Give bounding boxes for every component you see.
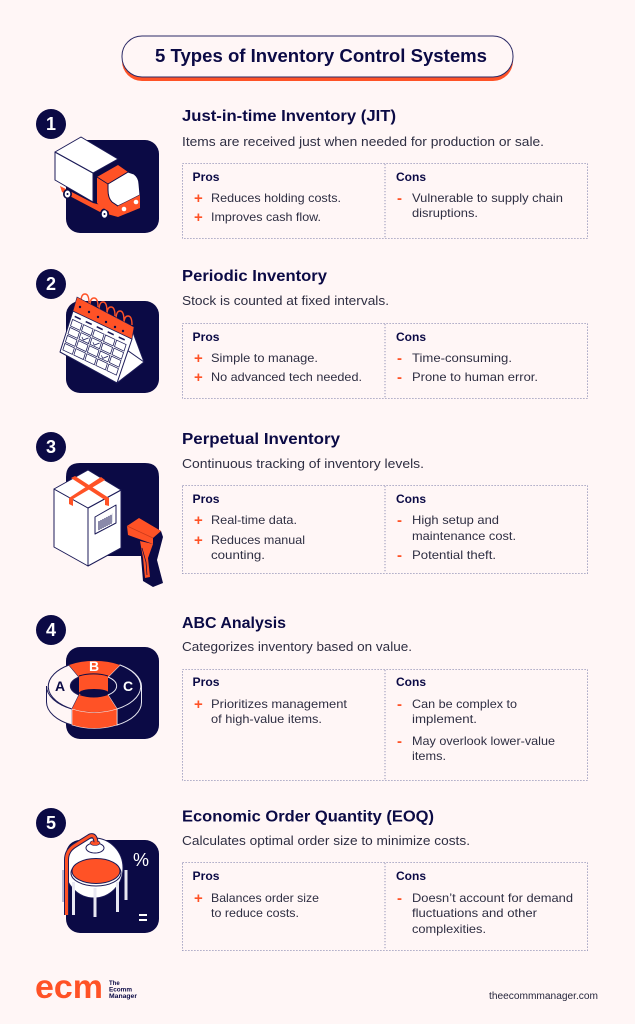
pros and cons table: [182, 164, 588, 238]
footer logo: [35, 968, 138, 1005]
heading: ABC Analysis: [182, 615, 286, 632]
cons: [396, 170, 563, 220]
pros: Balances order size: [211, 891, 319, 905]
pros and cons table: [182, 486, 588, 574]
pros and cons table: [182, 670, 588, 780]
panel: perpetual inventory: [36, 431, 588, 587]
cons: -: [397, 512, 402, 529]
pros: [192, 170, 341, 226]
cons: implement.: [412, 712, 477, 726]
panel: periodic inventory: [36, 268, 588, 398]
pros: Pros: [192, 170, 220, 184]
pros: Pros: [192, 330, 220, 344]
panel: just-in-time inventory: [36, 108, 588, 238]
description: Calculates optimal order size to minimize costs.: [182, 833, 470, 848]
pros: Prioritizes management: [211, 697, 348, 711]
icon: storage tank: %: [133, 850, 149, 870]
number badge 1: [36, 109, 66, 139]
cons: Potential theft.: [412, 548, 496, 562]
pros: Pros: [192, 492, 220, 506]
cons: Cons: [396, 869, 426, 883]
cons: Cons: [396, 492, 426, 506]
number badge 3: 3: [46, 437, 56, 457]
number badge 5: 5: [46, 813, 56, 833]
number badge 5: [36, 808, 66, 838]
panel: abc analysis: [36, 615, 588, 780]
cons: disruptions.: [412, 206, 478, 220]
pros: of high-value items.: [211, 712, 322, 726]
cons: Cons: [396, 330, 426, 344]
footer logo: ecm: [35, 968, 103, 1005]
cons: Cons: [396, 675, 426, 689]
title: [122, 36, 513, 81]
number badge 3: [36, 432, 66, 462]
pros: Simple to manage.: [211, 351, 318, 365]
cons: Time-consuming.: [412, 351, 512, 365]
cons: Prone to human error.: [412, 370, 538, 384]
title: 5 Types of Inventory Control Systems: [155, 46, 487, 66]
number badge 2: [36, 269, 66, 299]
cons: Cons: [396, 170, 426, 184]
cons: Doesn’t account for demand: [412, 891, 573, 905]
pros: +: [194, 696, 203, 713]
number badge 4: 4: [46, 620, 56, 640]
cons: items.: [412, 749, 446, 763]
footer logo: Manager: [109, 994, 138, 1000]
description: Categorizes inventory based on value.: [182, 639, 412, 654]
panel: economic order quantity: [36, 808, 588, 950]
description: Stock is counted at fixed intervals.: [182, 293, 389, 308]
pros: +: [194, 190, 203, 207]
cons: complexities.: [412, 922, 486, 936]
pros: Reduces manual: [211, 533, 305, 547]
cons: -: [397, 696, 402, 713]
number badge 1: 1: [46, 114, 56, 134]
cons: -: [397, 350, 402, 367]
pros: [192, 675, 348, 726]
pros: Improves cash flow.: [211, 210, 321, 224]
pros: Reduces holding costs.: [211, 191, 341, 205]
pros: [192, 492, 305, 562]
number badge 2: 2: [46, 274, 56, 294]
pros: +: [194, 512, 203, 529]
pros: +: [194, 890, 203, 907]
heading: Perpetual Inventory: [182, 431, 340, 448]
cons: -: [397, 190, 402, 207]
cons: [396, 492, 516, 564]
pros: Real-time data.: [211, 513, 297, 527]
cons: High setup and: [412, 513, 499, 527]
icon: abc ring chart: B: [89, 658, 99, 674]
cons: [396, 330, 538, 386]
pros: +: [194, 369, 203, 386]
cons: -: [397, 890, 402, 907]
pros and cons table: [182, 324, 588, 398]
cons: -: [397, 369, 402, 386]
icon: abc ring chart: C: [123, 678, 133, 694]
icon: truck: [55, 137, 159, 233]
heading: Periodic Inventory: [182, 268, 327, 285]
heading: Just-in-time Inventory (JIT): [182, 108, 396, 125]
cons: -: [397, 547, 402, 564]
pros: +: [194, 350, 203, 367]
cons: -: [397, 733, 402, 750]
pros: to reduce costs.: [211, 906, 299, 920]
icon: abc ring chart: [46, 647, 159, 739]
description: Items are received just when needed for production or sale.: [182, 134, 544, 149]
icon: calendar: [60, 294, 159, 393]
cons: May overlook lower-value: [412, 734, 555, 748]
icon: box and barcode scanner: [54, 463, 163, 587]
cons: fluctuations and other: [412, 906, 537, 920]
pros: +: [194, 209, 203, 226]
cons: Can be complex to: [412, 697, 517, 711]
pros: +: [194, 532, 203, 549]
cons: [396, 869, 573, 936]
pros: [192, 869, 319, 920]
number badge 4: [36, 615, 66, 645]
cons: maintenance cost.: [412, 529, 516, 543]
pros: counting.: [211, 548, 265, 562]
pros: Pros: [192, 869, 220, 883]
description: Continuous tracking of inventory levels.: [182, 456, 424, 471]
cons: [396, 675, 555, 763]
pros: No advanced tech needed.: [211, 370, 362, 384]
footer logo: Ecomm: [109, 988, 132, 994]
icon: storage tank: [62, 836, 159, 933]
footer logo: The: [109, 981, 120, 987]
pros: [192, 330, 362, 386]
heading: Economic Order Quantity (EOQ): [182, 808, 434, 826]
icon: abc ring chart: A: [55, 678, 65, 694]
pros: Pros: [192, 675, 220, 689]
pros and cons table: [182, 862, 588, 950]
footer website: theecommmanager.com: [489, 991, 598, 1002]
cons: Vulnerable to supply chain: [412, 191, 563, 205]
